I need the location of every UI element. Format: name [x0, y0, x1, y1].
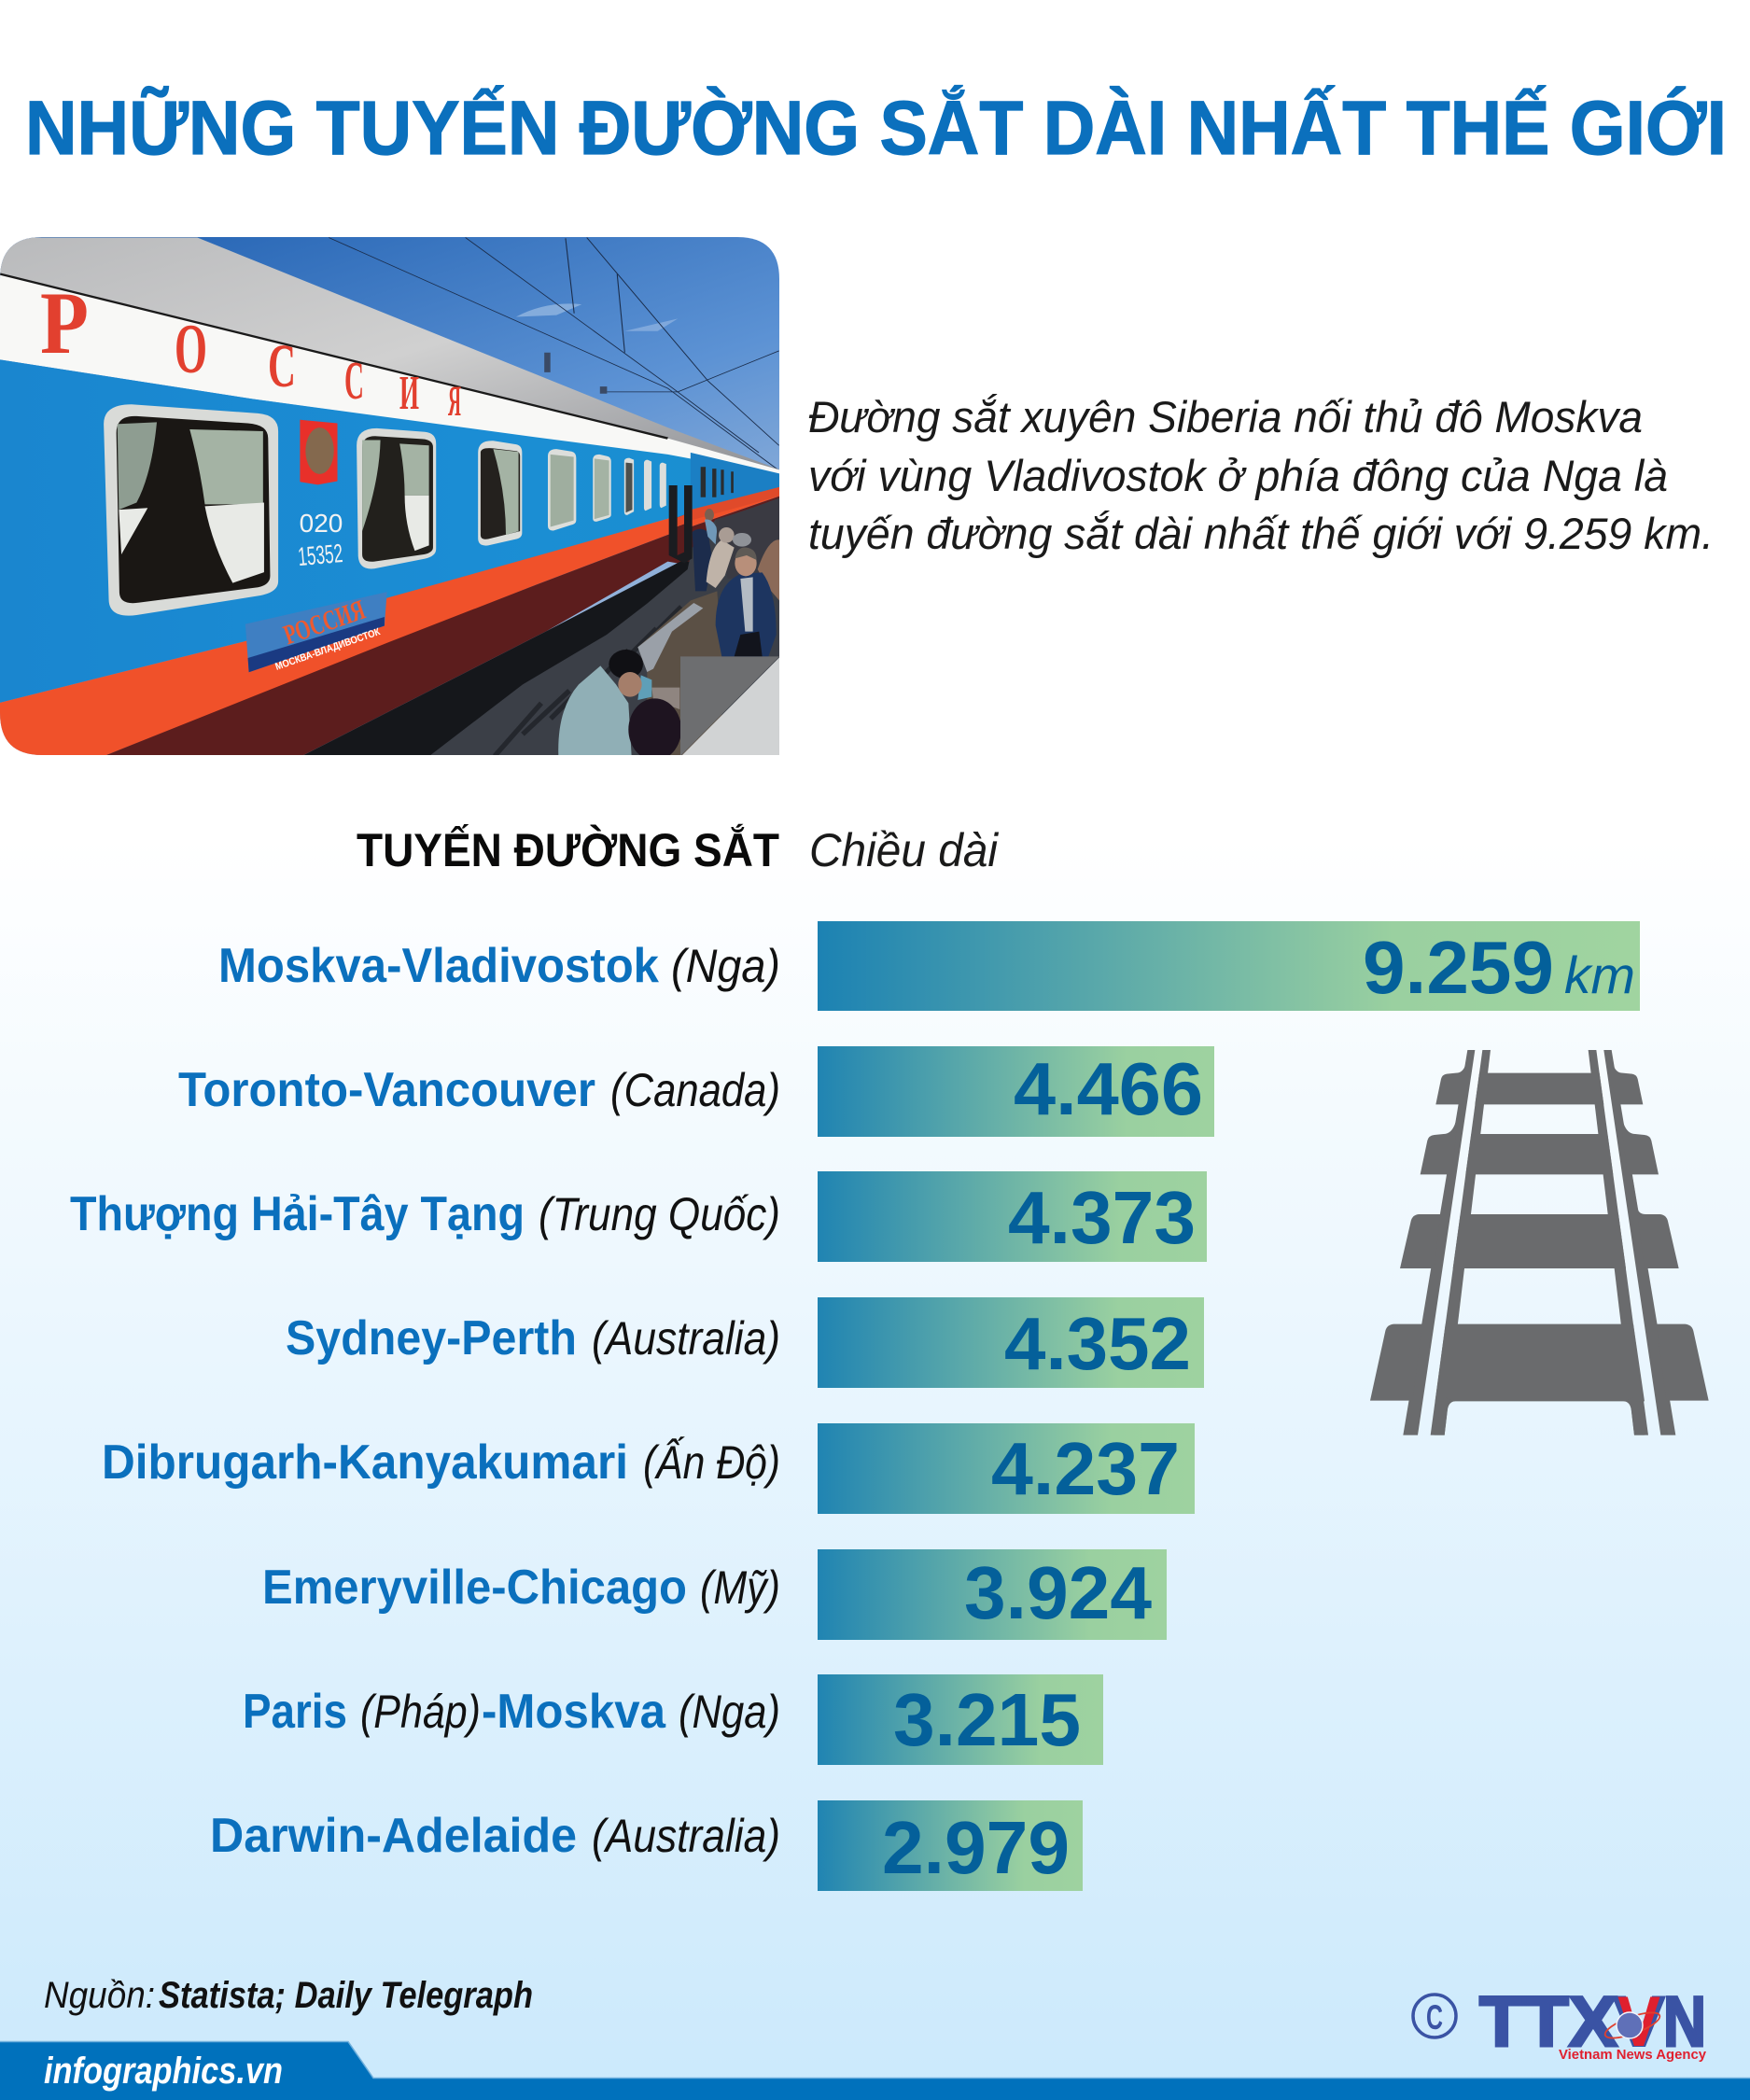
- icon: railway track: [1370, 1050, 1709, 1435]
- intro paragraph: [808, 392, 1714, 558]
- logo: TTXVN copyright: Vietnam News Agency: [1559, 2047, 1707, 2063]
- logo: TTXVN copyright: C: [1426, 1998, 1443, 2037]
- logo: TTXVN copyright: V: [1617, 1982, 1660, 2062]
- row: Darwin-Adelaide: 2.979: [882, 1806, 1070, 1889]
- row: Thượng Hải-Tây Tạng: (Trung Quốc): [539, 1188, 780, 1240]
- column heading: route: TUYẾN ĐƯỜNG SẮT: [357, 824, 779, 876]
- row: Paris-Moskva: Paris: [243, 1685, 347, 1739]
- row: Emeryville-Chicago: Emeryville-Chicago: [262, 1561, 687, 1615]
- source line: [44, 1975, 533, 2016]
- logo: TTXVN copyright: V: [1613, 1982, 1665, 2062]
- row: Dibrugarh-Kanyakumari: [102, 1423, 1195, 1514]
- carriage lettering: С: [268, 332, 296, 400]
- row: Thượng Hải-Tây Tạng: 4.373: [1008, 1176, 1196, 1259]
- carriage number: 15352: [297, 539, 343, 571]
- row: Sydney-Perth: 4.352: [1004, 1302, 1191, 1385]
- row: Sydney-Perth: Sydney-Perth: [286, 1311, 577, 1365]
- row: Moskva-Vladivostok: Moskva-Vladivostok: [218, 939, 659, 993]
- carriage lettering: И: [399, 367, 419, 420]
- row: Sydney-Perth: (Australia): [592, 1312, 780, 1365]
- row: Paris-Moskva: -Moskva: [482, 1685, 666, 1739]
- logo: TTXVN copyright: [1413, 1982, 1707, 2063]
- row: Paris-Moskva: [243, 1674, 1103, 1765]
- intro paragraph: với vùng Vladivostok ở phía đông của Nga là: [808, 451, 1668, 500]
- name board lettering: РОССИЯ: [280, 595, 370, 651]
- photo: Trans-Siberian train: [0, 234, 781, 761]
- row: Thượng Hải-Tây Tạng: Thượng Hải-Tây Tạng: [70, 1187, 525, 1241]
- row: Toronto-Vancouver: [178, 1046, 1214, 1137]
- row: Darwin-Adelaide: [210, 1800, 1083, 1891]
- logo: TTXVN copyright: TTX: [1479, 1982, 1617, 2062]
- row: Moskva-Vladivostok: (Nga): [671, 940, 780, 992]
- carriage lettering: [41, 295, 461, 415]
- name board lettering: МОСКВА-ВЛАДИВОСТОК: [273, 626, 382, 673]
- row: Dibrugarh-Kanyakumari: (Ấn Độ): [643, 1436, 780, 1489]
- carriage number: [299, 513, 343, 566]
- page fold: [680, 656, 779, 756]
- emblem: [300, 420, 338, 484]
- row: Paris-Moskva: 3.215: [893, 1678, 1081, 1761]
- carriage lettering: Р: [40, 273, 89, 372]
- row: Toronto-Vancouver: Toronto-Vancouver: [178, 1063, 595, 1117]
- row: Emeryville-Chicago: [262, 1549, 1167, 1640]
- row: Paris-Moskva: (Nga): [679, 1686, 780, 1738]
- source line: Statista; Daily Telegraph: [159, 1975, 533, 2016]
- row: Darwin-Adelaide: Darwin-Adelaide: [210, 1809, 577, 1863]
- platform, tracks and passengers: [429, 485, 779, 761]
- source line: Nguồn:: [44, 1975, 155, 2016]
- website label: infographics.vn: [44, 2051, 283, 2092]
- row: Thượng Hải-Tây Tạng: [70, 1171, 1207, 1262]
- row: Toronto-Vancouver: (Canada): [610, 1064, 780, 1116]
- row: Darwin-Adelaide: (Australia): [592, 1810, 780, 1862]
- carriage number: 020: [300, 509, 343, 538]
- row: Moskva-Vladivostok: 9.259: [1363, 926, 1554, 1009]
- carriage lettering: С: [344, 350, 364, 411]
- name board lettering: [274, 599, 381, 670]
- row: Emeryville-Chicago: 3.924: [964, 1551, 1153, 1634]
- row: Moskva-Vladivostok: [218, 921, 1640, 1011]
- windows: [104, 404, 278, 616]
- row: Sydney-Perth: [286, 1297, 1204, 1388]
- row: Toronto-Vancouver: 4.466: [1014, 1047, 1203, 1130]
- photo: Trans-Siberian train: Я: [448, 377, 461, 426]
- row: Dibrugarh-Kanyakumari: Dibrugarh-Kanyakumari: [102, 1435, 628, 1490]
- row: Paris-Moskva: (Pháp): [360, 1686, 481, 1738]
- footer band: [0, 2041, 1750, 2100]
- logo: TTXVN copyright: N: [1663, 1982, 1706, 2062]
- row: Emeryville-Chicago: (Mỹ): [700, 1561, 780, 1614]
- name board: [245, 592, 387, 672]
- intro paragraph: tuyến đường sắt dài nhất thế giới với 9.259 km.: [808, 509, 1714, 558]
- row: Dibrugarh-Kanyakumari: 4.237: [991, 1427, 1180, 1510]
- row: Moskva-Vladivostok: km: [1564, 945, 1635, 1004]
- carriage lettering: О: [175, 311, 207, 388]
- intro paragraph: Đường sắt xuyên Siberia nối thủ đô Moskva: [808, 392, 1643, 441]
- column heading: length: Chiều dài: [809, 824, 1000, 876]
